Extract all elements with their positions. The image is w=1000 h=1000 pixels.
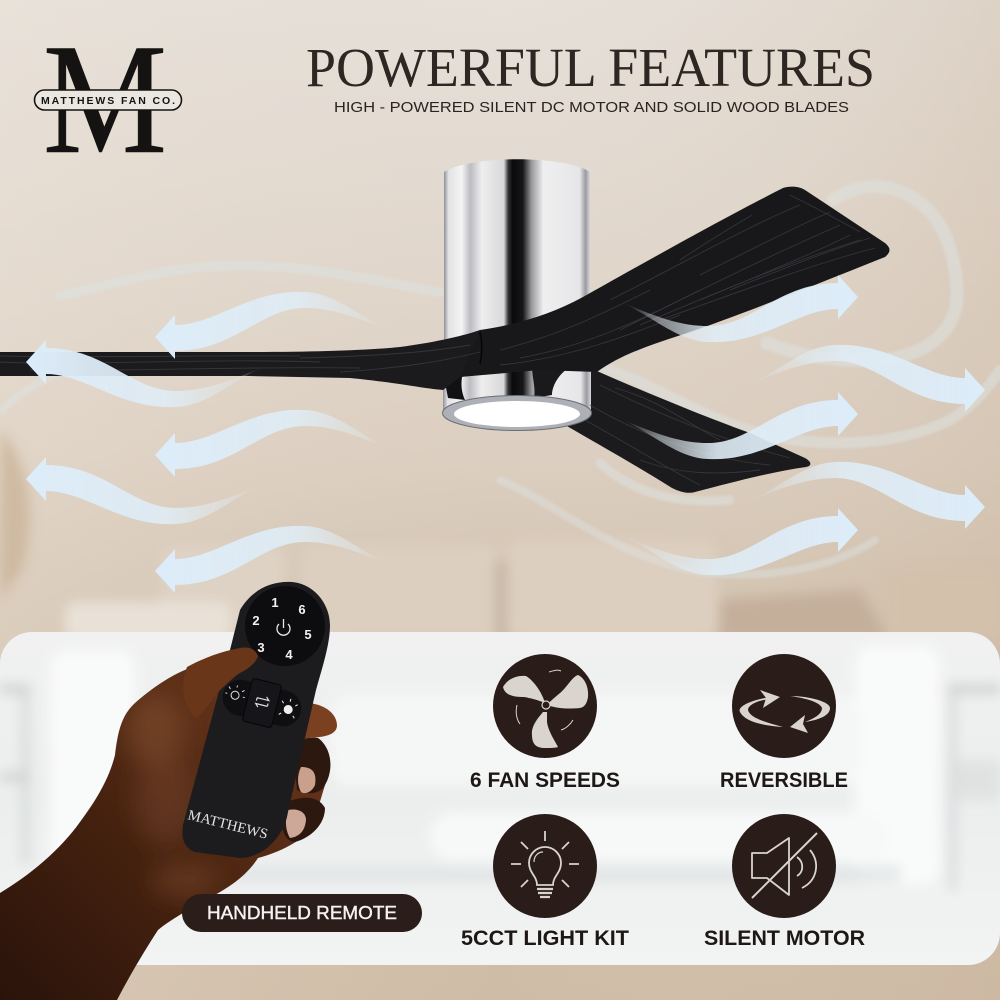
icon: light bulb (493, 814, 597, 918)
label: SILENT MOTOR (704, 927, 865, 950)
label pill: handheld remote (182, 894, 422, 932)
icon: fan (493, 654, 597, 758)
arrow: far left on blade (26, 340, 261, 407)
logo: Matthews Fan Co.: M (43, 12, 167, 187)
thumb (183, 647, 258, 718)
feature: 6 fan speeds (470, 654, 620, 792)
air flow arrows (26, 275, 985, 593)
wood grain (0, 195, 875, 485)
arrow: mid right (623, 392, 858, 459)
back fingers (280, 703, 337, 842)
arrow: far left lower (26, 457, 261, 524)
blade joint (480, 332, 482, 364)
hand and arm (0, 665, 325, 1000)
remote brand: MATTHEWS (186, 807, 269, 843)
remote dial (245, 586, 325, 666)
ceiling fan (0, 159, 890, 493)
light housing (442, 360, 592, 430)
arrow: upper right (623, 275, 858, 342)
fan blade: lower right (565, 368, 810, 493)
arrow: lower left (155, 526, 390, 593)
remote body (182, 582, 330, 858)
subtitle: HIGH - POWERED SILENT DC MOTOR AND SOLID WOOD BLADES (334, 99, 849, 116)
remote dial: 6 (298, 602, 306, 617)
remote dial: 5 (304, 627, 312, 642)
hand holding remote (0, 582, 337, 1000)
feature: 5cct light kit (461, 814, 629, 950)
fan blade: upper right (460, 187, 890, 377)
fan canopy: chrome cylinder (444, 159, 590, 345)
skin highlights (125, 694, 219, 898)
icon: muted speaker (732, 814, 836, 918)
title: POWERFUL FEATURES (306, 37, 875, 98)
arrow: far right lower (750, 462, 985, 529)
remote buttons (218, 672, 306, 734)
arrow: upper left (155, 292, 390, 359)
logo: Matthews Fan Co.: MATTHEWS FAN CO. (41, 95, 175, 107)
panel: features (0, 632, 1000, 965)
icon: rotation arrows (732, 654, 836, 758)
label: 6 FAN SPEEDS (470, 769, 620, 792)
feature: silent motor (704, 814, 865, 950)
label pill: handheld remote: HANDHELD REMOTE (207, 902, 397, 923)
fan blade: long left (0, 330, 500, 390)
label: REVERSIBLE (720, 769, 848, 792)
remote dial: 4 (285, 647, 293, 662)
feature: reversible (720, 654, 848, 792)
remote dial: 2 (252, 613, 260, 628)
arrow: far right upper (750, 345, 985, 412)
arrow: lower right (623, 508, 858, 575)
label: 5CCT LIGHT KIT (461, 927, 629, 950)
arrow: mid left (155, 410, 390, 477)
remote dial: 3 (257, 640, 265, 655)
remote dial: 1 (271, 595, 279, 610)
faint air swirls (2, 186, 1000, 575)
